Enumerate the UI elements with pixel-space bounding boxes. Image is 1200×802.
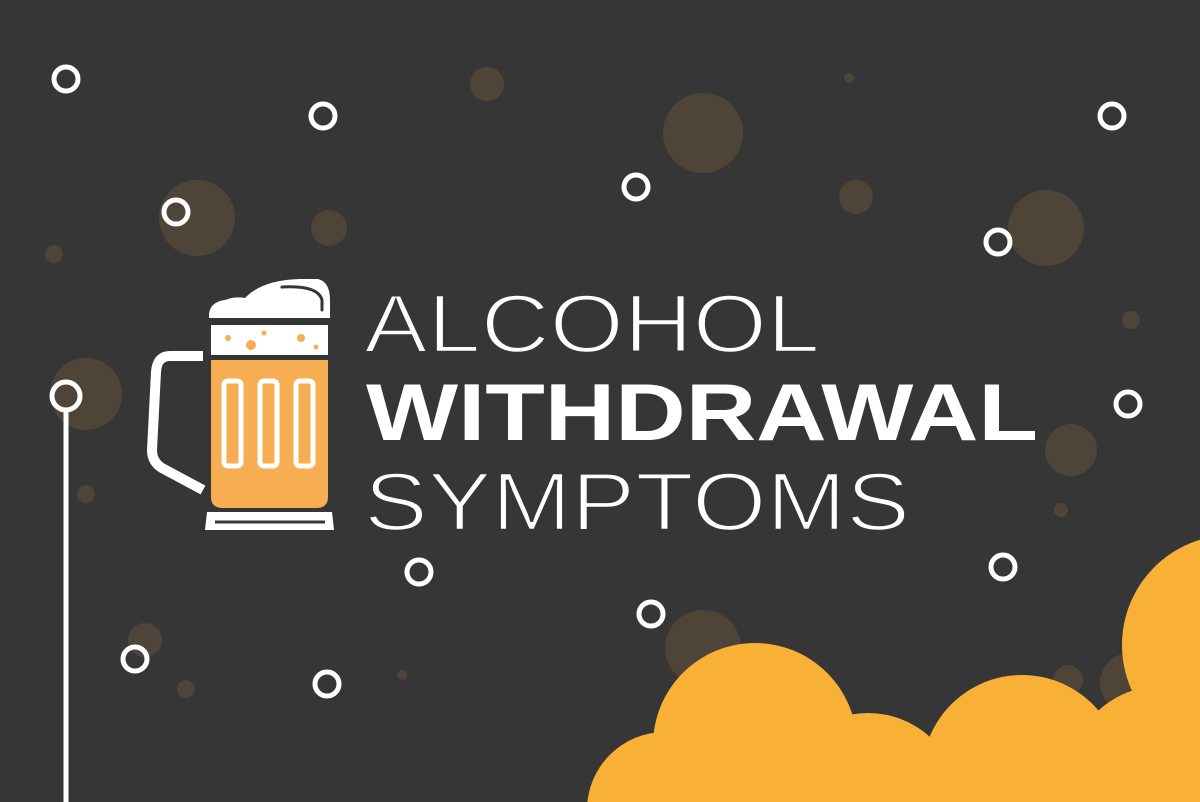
- white ring bubbles: [54, 67, 1140, 696]
- foam cloud: [587, 535, 1200, 802]
- handle: [152, 356, 203, 490]
- foam band: [211, 325, 328, 355]
- background bubbles: [45, 67, 1160, 713]
- beer body: [211, 360, 328, 508]
- icon: beer mug: [152, 279, 334, 530]
- rising bubble with stem: [52, 382, 80, 802]
- base: [205, 512, 334, 530]
- title: WITHDRAWAL: [366, 368, 1038, 458]
- title: ALCOHOL: [364, 277, 820, 370]
- title: [366, 296, 1035, 530]
- title: SYMPTOMS: [364, 455, 910, 548]
- foam top: [209, 279, 330, 318]
